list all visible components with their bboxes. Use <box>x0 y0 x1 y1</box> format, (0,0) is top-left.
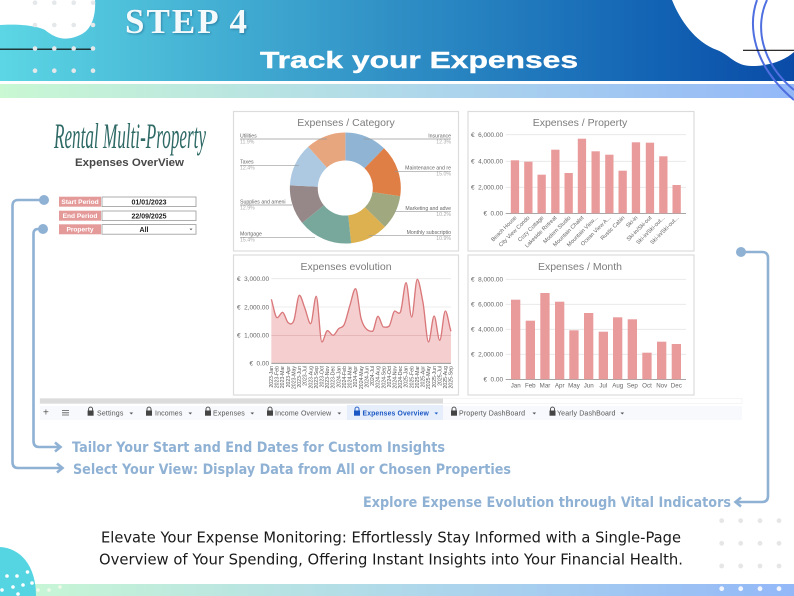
x axis labels: 2025-Jul <box>437 366 443 386</box>
x axis labels: Beach House <box>490 215 518 243</box>
y axis and grid: € 2,000.00 <box>237 304 269 311</box>
x axis labels: 2023-Oct <box>320 365 326 387</box>
donut labels: Maintenance and re <box>405 166 451 172</box>
x axis labels: 2024-Apr <box>353 366 359 387</box>
active tab highlight <box>347 405 443 420</box>
panel: expenses evolution <box>234 255 458 395</box>
x axis labels: Rustic Cabin <box>600 215 626 242</box>
x axis labels: 2023-Jul <box>303 366 309 386</box>
x axis labels <box>269 365 455 389</box>
x axis labels: 2023-Nov <box>325 366 331 388</box>
x axis labels: 2025-Aug <box>443 366 449 388</box>
subtitle: Expenses OverView <box>75 157 184 169</box>
y axis and grid: € 4,000.00 <box>471 158 503 166</box>
x axis labels: Mountain View... <box>566 215 600 248</box>
x axis labels: Jul <box>599 382 607 390</box>
y axis and grid: € 2,000.00 <box>471 352 503 359</box>
summary paragraph: Overview of Your Spending, Offering Instant Insights into Your Financial Health. <box>99 550 683 568</box>
donut chart <box>290 132 401 243</box>
tab: property dashboard <box>451 407 536 418</box>
x axis labels: 2023-Dec <box>331 366 337 388</box>
x axis labels: Aug <box>612 382 624 390</box>
donut labels: 12.4% <box>240 166 255 172</box>
filter: property: All <box>140 227 149 234</box>
decorative dots: top left <box>0 0 95 73</box>
x axis labels: 2025-Jan <box>404 366 410 388</box>
x axis labels: Jun <box>584 382 594 390</box>
x axis labels: Modern Studio <box>542 215 572 245</box>
x axis labels: 2024-Jul <box>370 366 376 386</box>
decorative dots: bottom left <box>0 570 62 596</box>
x axis labels: Mountain Chalet <box>552 215 586 248</box>
y axis and grid <box>237 276 451 368</box>
x axis labels: Ocean View A... <box>580 215 613 247</box>
chart title: Expenses / Category <box>297 117 395 129</box>
filter: property: Property <box>66 226 94 234</box>
x axis labels: Cozy Cottage <box>517 215 545 243</box>
donut labels: Utilities <box>240 133 257 139</box>
x axis labels: 2023-May <box>291 366 297 389</box>
x axis labels: 2023-Jan <box>269 366 275 388</box>
sheet tab bar <box>40 398 742 420</box>
x axis labels: Apr <box>555 382 565 390</box>
donut labels: 10.2% <box>436 212 451 218</box>
tab: expenses <box>205 407 254 418</box>
chart title: Expenses / Month <box>538 261 622 273</box>
x axis labels: Oct <box>642 382 652 390</box>
filter: start period <box>59 197 196 207</box>
y axis and grid: € 1,000.00 <box>237 332 269 340</box>
heading: step number: STEP 4 <box>125 2 247 41</box>
panel: expenses by month <box>468 255 694 395</box>
x axis labels: 2024-Mar <box>348 366 354 388</box>
x axis labels: 2025-Sep <box>449 366 455 388</box>
tab: income overview <box>267 407 341 418</box>
heading: track your expenses: Track your Expenses <box>260 47 578 73</box>
x axis labels: 2024-Nov <box>392 366 398 388</box>
x axis labels: Lakeside Retreat <box>524 215 559 249</box>
x axis labels: 2023-Jun <box>297 366 303 388</box>
x axis labels: 2025-Jun <box>432 366 438 388</box>
y axis and grid: € 6,000.00 <box>471 302 503 309</box>
caption: tailor dates: Tailor Your Start and End Dates for Custom Insights <box>72 440 445 456</box>
panel: expenses by property <box>468 112 694 251</box>
summary paragraph <box>99 528 683 568</box>
dashboard title block <box>54 116 206 169</box>
x axis labels: Sep <box>627 382 638 390</box>
x axis labels: Ski-in/Ski-out <box>626 215 654 243</box>
tab: income overview: Income Overview <box>275 410 332 418</box>
y axis and grid: € 4,000.00 <box>471 327 503 334</box>
tab: expenses: Expenses <box>213 410 245 418</box>
x axis labels: Mar <box>540 382 550 390</box>
decorative blob: bottom left <box>0 547 62 596</box>
bottom gradient band <box>0 584 794 596</box>
x axis labels: 2024-May <box>359 366 365 389</box>
tab: settings <box>88 407 133 418</box>
x axis labels <box>511 382 682 390</box>
tab: settings: Settings <box>97 410 124 418</box>
decorative blob: top right <box>672 0 794 66</box>
add sheet control: + <box>43 408 49 418</box>
tab: expenses overview (active): Expenses Overview <box>362 410 429 418</box>
x axis labels: 2023-Aug <box>308 366 314 388</box>
x axis labels: Dec <box>671 382 682 390</box>
filter: end period: End Period <box>63 213 97 220</box>
x axis labels: Feb <box>525 382 536 390</box>
y axis and grid: € 0.00 <box>249 360 269 368</box>
decorative arcs and line: top right <box>743 0 794 100</box>
donut labels: 12.9% <box>240 206 255 212</box>
donut labels: 15.4% <box>240 238 255 244</box>
x axis labels: Nov <box>656 382 668 390</box>
y axis and grid <box>471 132 686 218</box>
header banner <box>0 0 794 81</box>
filter: end period <box>59 211 196 221</box>
x axis labels: 2025-Feb <box>409 366 415 388</box>
chart title: Expenses evolution <box>300 261 392 273</box>
x axis labels: May <box>568 382 581 390</box>
caption: expense evolution: Explore Expense Evolution through Vital Indicators <box>363 495 731 511</box>
arrow: start period to select view caption <box>12 195 62 472</box>
donut labels: Mortgage <box>240 231 262 237</box>
arrow: property to tailor dates caption <box>34 224 60 452</box>
x axis labels: 2024-Sep <box>381 366 387 388</box>
x axis labels: 2024-Jun <box>364 366 370 388</box>
x axis labels: 2024-Feb <box>342 366 348 388</box>
donut labels: Taxes <box>240 160 254 166</box>
summary paragraph: Elevate Your Expense Monitoring: Effortlessly Stay Informed with a Single-Page <box>101 528 681 546</box>
y axis and grid: € 8,000.00 <box>471 277 503 284</box>
x axis labels: Ski-in <box>625 215 639 229</box>
text: Rental Multi-Property <box>54 116 206 156</box>
x axis labels: 2024-Aug <box>376 366 382 388</box>
donut labels: Monthly subscriptio <box>407 230 451 236</box>
x axis labels <box>490 215 681 249</box>
y axis and grid: € 2,000.00 <box>471 184 503 192</box>
tab: yearly dashboard <box>550 407 624 418</box>
tab: property dashboard: Property DashBoard <box>459 410 525 418</box>
x axis labels: 2025-May <box>426 366 432 389</box>
tab: yearly dashboard: Yearly DashBoard <box>557 410 616 418</box>
tab: incomes: Incomes <box>155 410 183 418</box>
arrow: charts to evolution caption <box>736 247 768 506</box>
x axis labels: 2024-Dec <box>398 366 404 388</box>
donut labels: Marketing and adve <box>405 206 451 212</box>
x axis labels: 2025-Apr <box>421 366 427 387</box>
decorative blob: top left <box>0 0 95 39</box>
donut leader lines <box>240 139 451 237</box>
filter: start period: Start Period <box>61 199 99 206</box>
donut labels: Insurance <box>428 133 451 139</box>
donut labels: Supplies and ameni <box>240 200 286 206</box>
y axis and grid: € 6,000.00 <box>471 132 503 139</box>
filter: property <box>59 224 196 234</box>
donut labels: 15.0% <box>436 172 451 178</box>
y axis and grid: € 3,000.00 <box>237 276 269 283</box>
bar chart <box>511 293 681 379</box>
panel: expenses by category <box>234 112 458 251</box>
tab: expenses overview (active) <box>354 407 438 418</box>
y axis and grid: € 0.00 <box>483 377 503 384</box>
donut labels: 11.9% <box>240 140 255 146</box>
x axis labels: Ski-in/Ski-out... <box>636 215 667 246</box>
sheet list control <box>62 410 69 415</box>
x axis labels: 2023-Mar <box>280 366 286 388</box>
x axis labels: 2025-Mar <box>415 366 421 388</box>
y axis and grid <box>471 277 686 384</box>
x axis labels: Ski-in/Ski-out... <box>650 215 681 246</box>
x axis labels: Jan <box>511 382 521 390</box>
filter: end period: 22/09/2025 <box>131 213 167 220</box>
x axis labels: 2024-Oct <box>387 365 393 387</box>
filter: start period: 01/01/2023 <box>131 199 167 206</box>
tab: incomes <box>146 407 192 418</box>
y axis and grid: € 0.00 <box>483 210 503 218</box>
x axis labels: 2023-Sep <box>314 366 320 388</box>
decorative dots: bottom right <box>719 518 781 591</box>
x axis labels: 2023-Feb <box>275 366 281 388</box>
x axis labels: City View Condo <box>498 215 531 249</box>
top gradient band <box>0 84 794 98</box>
x axis labels: 2024-Jan <box>336 366 342 388</box>
donut labels: 12.3% <box>436 140 451 146</box>
donut labels: 10.9% <box>436 236 451 242</box>
donut labels <box>240 133 451 244</box>
bar chart <box>511 139 681 213</box>
filter form <box>59 197 196 234</box>
x axis labels: 2023-Apr <box>286 366 292 387</box>
chart title: Expenses / Property <box>533 117 628 129</box>
caption: select view: Select Your View: Display Data from All or Chosen Properties <box>73 462 511 478</box>
area chart <box>271 279 451 363</box>
